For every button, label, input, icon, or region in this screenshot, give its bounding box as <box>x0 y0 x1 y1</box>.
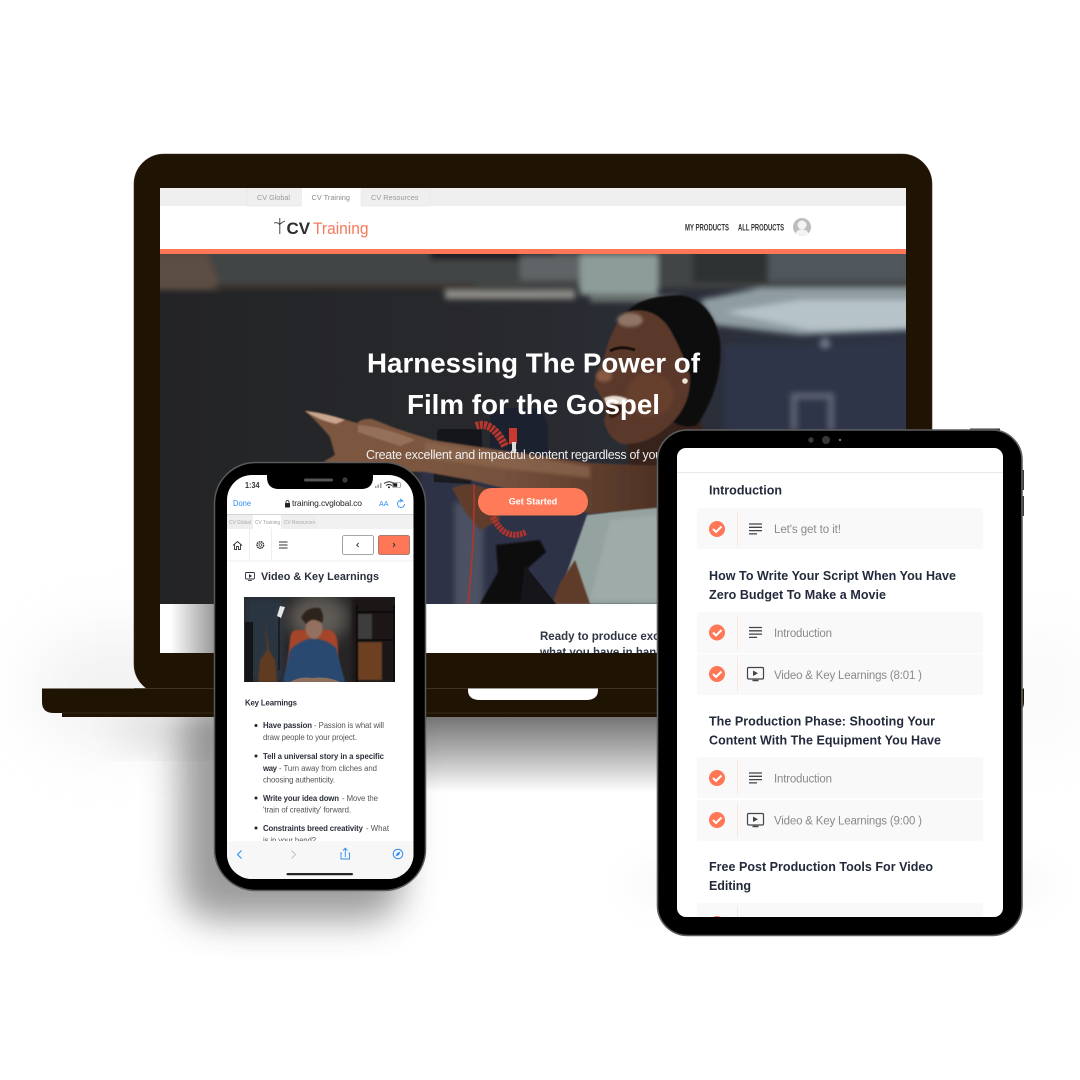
hero subtitle: Create excellent and impactful content regardless of your <box>366 448 666 462</box>
tripod <box>480 540 546 604</box>
tablet screen <box>677 448 1003 932</box>
lesson row <box>697 508 983 549</box>
red cable and coil <box>468 484 474 604</box>
neck <box>626 420 704 466</box>
section: script: Zero Budget To Make a Movie <box>709 588 886 602</box>
tablet body <box>658 430 1022 936</box>
phone site tabs <box>227 515 414 529</box>
previous button <box>342 536 374 554</box>
icon: list <box>279 542 288 548</box>
laptop screen <box>140 188 930 659</box>
woman <box>305 295 721 604</box>
background shadows <box>30 630 1080 920</box>
phone toolbar <box>227 529 414 561</box>
status bar: 1:34 <box>245 481 260 490</box>
laptop lid <box>134 154 932 694</box>
browser tab bar: CV Global <box>257 193 290 202</box>
key learnings list: - Passion is what will <box>314 721 384 730</box>
lesson row <box>697 800 983 841</box>
site navigation: ALL PRODUCTS <box>738 222 784 232</box>
phone notch <box>267 474 373 489</box>
lesson row: Video & Key Learnings (9:00 ) <box>774 816 922 828</box>
phone <box>214 462 426 890</box>
face <box>594 310 690 444</box>
pointing arm <box>305 411 665 514</box>
lesson row: Video & Key Learnings (8:01 ) <box>774 670 922 682</box>
url bar: Done <box>233 499 252 508</box>
browser tab bar: CV Resources <box>371 193 419 202</box>
laptop <box>42 154 1024 717</box>
key learnings list: is in your hand? <box>263 836 317 845</box>
lesson row <box>697 757 983 798</box>
phone site tabs: CV Training <box>255 520 280 526</box>
key learnings list: draw people to your project. <box>263 733 357 742</box>
key learnings list: Constraints breed creativity <box>263 824 364 833</box>
section: production: Content With The Equipment You Have <box>709 734 941 748</box>
get started button: Get Started <box>509 496 557 506</box>
icon: gear <box>257 542 264 548</box>
tablet <box>658 430 1023 936</box>
lesson row <box>697 654 983 695</box>
key learnings list: Have passion <box>263 721 312 730</box>
key learnings list: - What <box>366 824 390 833</box>
section: post production <box>697 860 983 932</box>
key learnings list: Key Learnings <box>245 698 298 708</box>
lesson row: Let's get to it! <box>774 524 841 536</box>
phone screen <box>227 475 414 879</box>
orange divider <box>160 249 906 254</box>
url bar <box>227 498 414 514</box>
hair <box>627 295 721 427</box>
key learnings list: - Move the <box>342 794 378 803</box>
key learnings list: 'train of creativity' forward. <box>263 806 351 814</box>
lower page copy <box>540 631 657 653</box>
hero photograph <box>160 254 906 604</box>
section: introduction: Introduction <box>709 484 782 498</box>
ceiling blur <box>160 254 906 604</box>
site navigation: MY PRODUCTS <box>685 222 729 232</box>
icon: home <box>233 542 242 550</box>
key learnings list: - Turn away from cliches and <box>279 764 377 773</box>
camera <box>433 408 548 484</box>
laptop base <box>42 688 1024 717</box>
key learnings list: way <box>262 764 278 773</box>
lesson heading: Video & Key Learnings <box>261 571 379 583</box>
section: introduction <box>697 484 983 549</box>
phone site tabs: CV Resources <box>284 520 315 526</box>
site logo: Training <box>313 220 368 238</box>
safari bottom bar <box>227 848 414 879</box>
key learnings list: Write your idea down <box>263 794 339 803</box>
section: production: The Production Phase: Shooting Your <box>709 714 935 728</box>
key learnings list: choosing authenticity. <box>263 776 335 784</box>
lesson row <box>697 612 983 653</box>
next button <box>378 536 410 554</box>
section: post production: Free Post Production Tools For Video <box>709 860 933 874</box>
section: script <box>697 569 983 695</box>
pointing hand <box>305 410 408 462</box>
status bar <box>245 481 401 488</box>
url bar: training.cvglobal.co <box>292 498 362 508</box>
key learnings list: Tell a universal story in a specific <box>263 752 385 761</box>
hero overlay heading: Film for the Gospel <box>407 389 660 420</box>
shirt <box>556 505 660 604</box>
phone site tabs: CV Global <box>229 520 251 526</box>
lesson row: Introduction <box>774 774 832 786</box>
holding hand <box>452 484 500 530</box>
browser tab bar: CV Training <box>312 193 350 202</box>
get started button <box>478 488 588 516</box>
lesson row: Introduction <box>774 628 832 640</box>
hero overlay heading <box>367 348 701 420</box>
section: production <box>697 714 983 841</box>
section: script: How To Write Your Script When You Have <box>709 569 956 583</box>
lower page copy: what you have in hand? <box>539 647 670 659</box>
site logo: CV <box>286 220 310 238</box>
phone body <box>214 462 426 890</box>
browser tab bar <box>160 188 906 206</box>
tablet side buttons <box>970 430 1023 516</box>
site navigation <box>685 218 811 236</box>
section: post production: Editing <box>709 879 751 893</box>
url bar: AA <box>379 499 388 508</box>
lower page copy: Ready to produce excellent content with <box>540 631 760 643</box>
site logo <box>274 218 368 238</box>
tablet cameras <box>808 436 841 444</box>
video thumbnail photo <box>244 594 395 682</box>
hero overlay heading: Harnessing The Power of <box>367 348 701 378</box>
key learnings list <box>245 698 390 845</box>
